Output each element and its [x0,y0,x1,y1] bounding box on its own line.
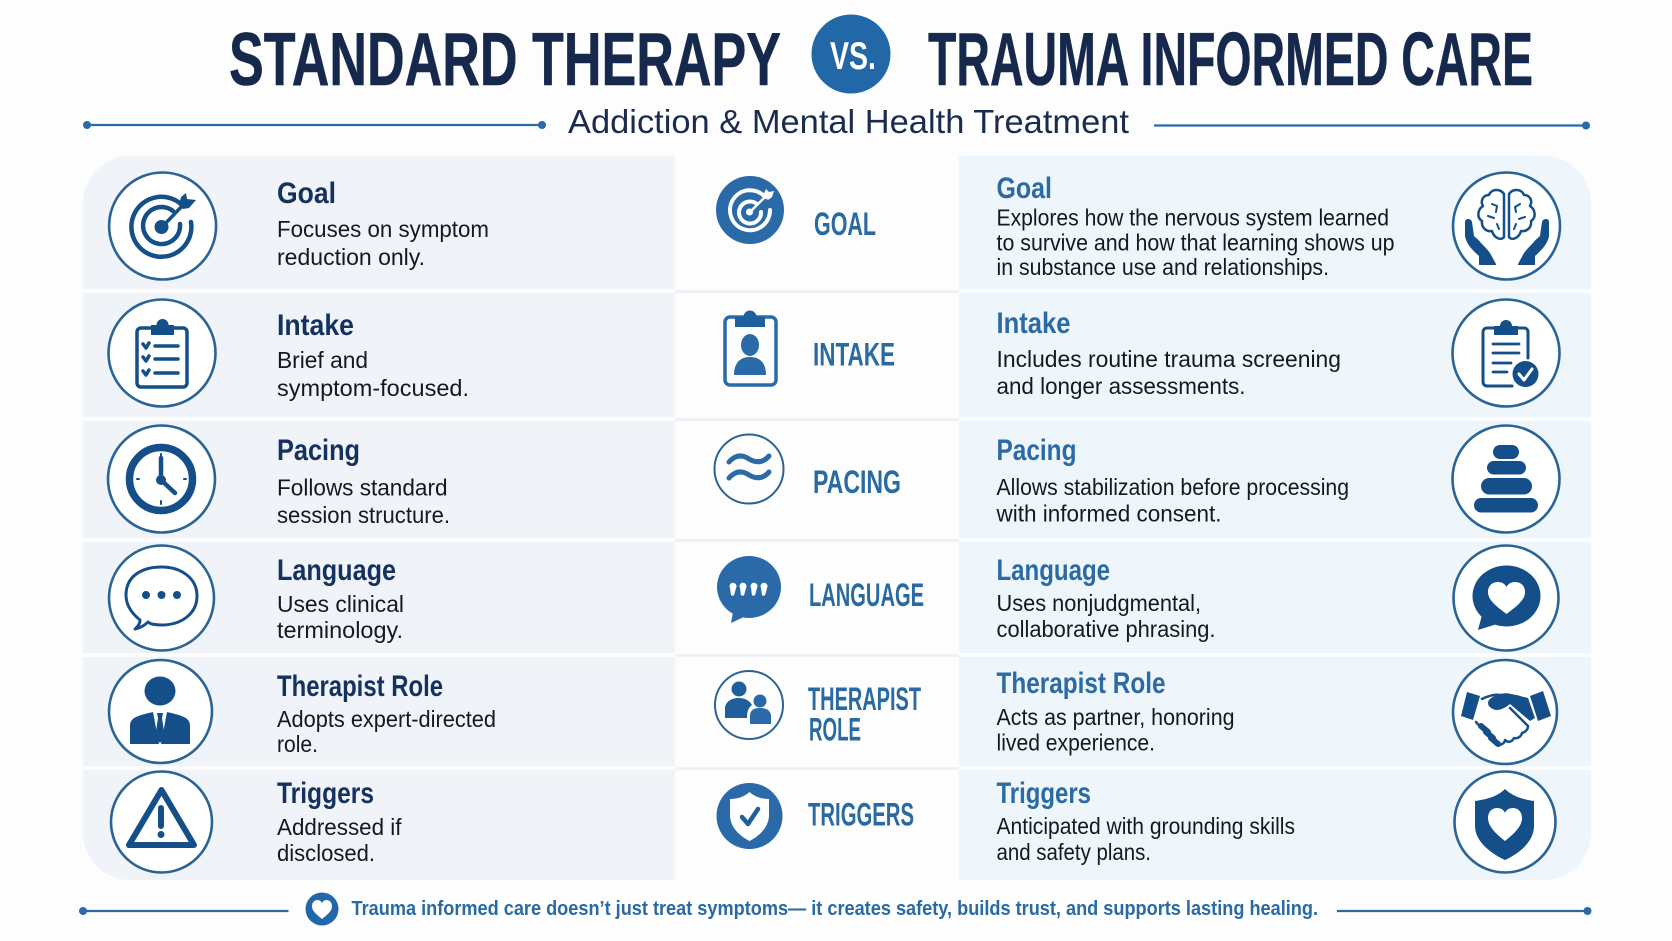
text: trauma informed pacing [996,434,1349,526]
row: trauma informed intake [959,293,1591,417]
icon: heart badge [306,892,338,926]
text: trauma informed intake: and longer assessments. [996,373,1246,399]
text: standard language: Uses clinical [277,591,404,617]
row: standard language [83,542,675,653]
category: language [717,556,924,623]
vs badge [812,14,890,94]
text: standard intake [277,309,469,401]
text: standard intake: Brief and [277,347,368,373]
text: trauma informed intake: Intake [996,307,1070,340]
category: triggers [716,783,914,849]
row: trauma informed therapist role [959,657,1591,766]
text: trauma informed goal: Goal [996,172,1052,205]
category: goal: GOAL [814,206,876,242]
category: therapist role: THERAPIST [808,681,921,717]
panel: category column [675,176,959,849]
text: trauma informed goal [996,172,1394,280]
text: trauma informed therapist role: Therapist Role [996,667,1166,700]
icon: stacked stones [1452,426,1560,532]
text: trauma informed language: Language [996,554,1110,587]
text: standard pacing: session structure. [277,502,450,528]
text: trauma informed intake: Includes routine trauma screening [996,346,1341,372]
text: standard therapist role [277,670,496,757]
text: standard therapist role: role. [277,731,318,757]
text: standard pacing: Pacing [277,434,360,467]
category: intake [725,311,895,385]
text: standard goal: Goal [277,177,336,210]
panel: standard therapy column [83,156,675,880]
category: therapist role [715,671,921,748]
text: standard goal [277,177,489,270]
text: standard language: terminology. [277,617,403,643]
category: intake: INTAKE [813,336,895,372]
text: standard therapist role: Adopts expert-directed [277,706,496,732]
subtitle [83,103,1590,140]
icon: speech bubble [109,546,214,650]
title [229,14,1533,101]
text: standard triggers: Addressed if [277,814,402,840]
subtitle: Addiction & Mental Health Treatment [568,103,1129,140]
title: STANDARD THERAPY [229,17,781,101]
text: trauma informed therapist role: Acts as partner, honoring [996,704,1234,730]
text: trauma informed language: collaborative phrasing. [996,616,1216,642]
text: trauma informed goal: Explores how the nervous system learned [996,204,1389,230]
footer callout [79,892,1592,926]
row: trauma informed language [959,542,1591,653]
text: standard therapist role: Therapist Role [277,670,443,703]
row: standard triggers [83,770,675,880]
text: trauma informed pacing: with informed consent. [996,500,1222,526]
icon: heart speech bubble [1454,546,1558,650]
text: trauma informed pacing: Pacing [996,434,1076,467]
category: language: LANGUAGE [809,577,924,613]
text: trauma informed triggers: Anticipated with grounding skills [996,813,1295,839]
text: trauma informed therapist role: lived experience. [996,730,1155,756]
icon: clock [108,426,215,532]
text: trauma informed triggers: Triggers [996,777,1091,810]
text: trauma informed triggers: and safety plans. [996,839,1151,865]
text: standard intake: symptom-focused. [277,375,469,401]
text: trauma informed language [996,554,1216,642]
icon: handshake [1453,660,1557,764]
category: therapist role: ROLE [809,712,861,748]
text: standard language: Language [277,554,396,587]
panel: trauma informed care column [959,156,1591,880]
text: trauma informed therapist role [996,667,1234,756]
text: standard language [277,554,404,643]
text: trauma informed pacing: Allows stabilization before processing [996,474,1349,500]
text: standard pacing: Follows standard [277,474,448,500]
category: pacing: PACING [813,464,901,500]
vs badge: VS. [830,35,876,78]
footer callout: Trauma informed care doesn’t just treat symptoms— it creates safety, builds trust, and supports lasting healing. [352,897,1318,920]
row: trauma informed goal [959,156,1591,289]
text: trauma informed language: Uses nonjudgmental, [996,590,1201,616]
icon: clipboard with check [1452,300,1560,406]
category: triggers: TRIGGERS [808,796,914,832]
text: standard pacing [277,434,450,528]
icon: expert person [109,660,212,763]
row: trauma informed pacing [959,421,1591,538]
text: trauma informed goal: in substance use and relationships. [996,254,1329,280]
text: standard triggers: disclosed. [277,840,375,866]
text: standard goal: Focuses on symptom [277,216,489,242]
text: standard triggers [277,777,402,866]
icon: brain in hands [1453,172,1560,280]
row: standard therapist role [83,657,675,766]
category: pacing [714,434,901,504]
icon: checklist clipboard [108,300,216,406]
row: standard goal [83,156,675,289]
category: goal [716,176,876,244]
row: standard pacing [83,421,675,538]
text: standard triggers: Triggers [277,777,374,810]
row: standard intake [83,293,675,417]
text: standard intake: Intake [277,309,354,342]
text: trauma informed intake [996,307,1341,399]
text: trauma informed triggers [996,777,1295,865]
icon: shield with heart [1454,772,1556,872]
icon: target [109,172,216,280]
row: trauma informed triggers [959,770,1591,880]
text: standard goal: reduction only. [277,244,425,270]
icon: warning triangle [111,772,212,872]
text: trauma informed goal: to survive and how that learning shows up [996,230,1394,256]
